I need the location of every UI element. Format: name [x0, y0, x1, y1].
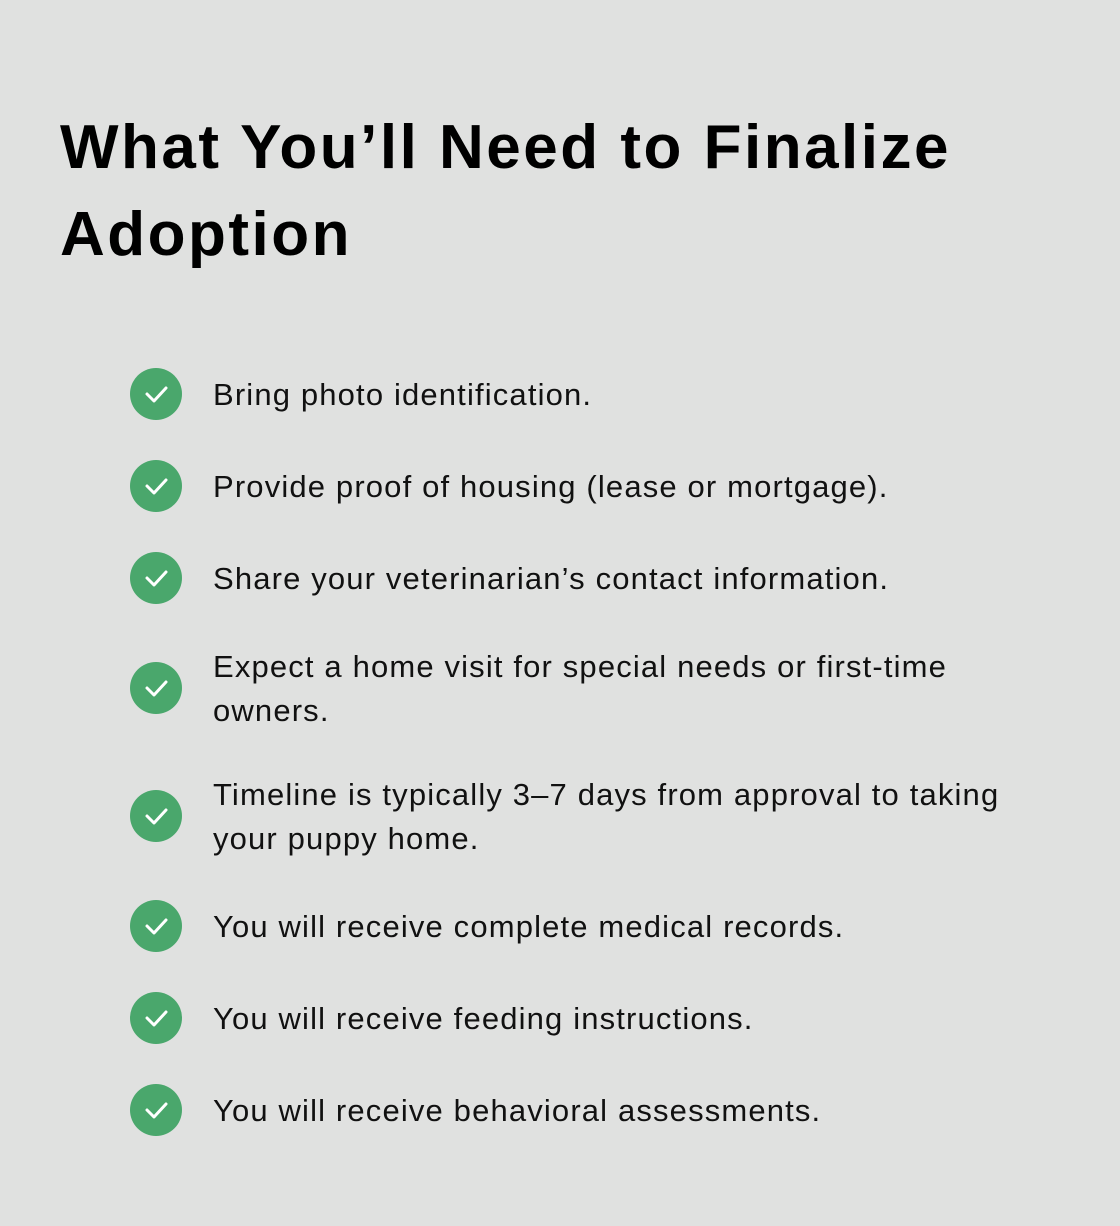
item 8: You will receive behavioral assessments.: [213, 1093, 821, 1128]
item 3: Share your veterinarian’s contact information.: [213, 561, 889, 596]
item 4: Expect a home visit for special needs or first-time: [213, 649, 947, 684]
title: What You’ll Need to Finalize: [60, 113, 951, 182]
item 2: Provide proof of housing (lease or mortgage).: [213, 469, 889, 504]
item 1: Bring photo identification.: [213, 377, 592, 412]
icon: check: [130, 460, 182, 512]
item 5: Timeline is typically 3–7 days from approval to taking: [213, 777, 999, 812]
icon: check: [130, 662, 182, 714]
icon: check: [130, 790, 182, 842]
icon: check: [130, 1084, 182, 1136]
item 6: [130, 900, 844, 952]
item 6: You will receive complete medical records.: [213, 909, 844, 944]
item 7: [130, 992, 754, 1044]
title: Adoption: [60, 200, 352, 269]
item 5: your puppy home.: [213, 821, 480, 856]
item 3: [130, 552, 889, 604]
icon: check: [130, 368, 182, 420]
item 8: [130, 1084, 821, 1136]
title: [60, 113, 951, 269]
item 1: [130, 368, 592, 420]
icon: check: [130, 992, 182, 1044]
icon: check: [130, 552, 182, 604]
item 4: owners.: [213, 693, 330, 728]
item 4: [130, 649, 947, 728]
item 7: You will receive feeding instructions.: [213, 1001, 754, 1036]
item 5: [130, 777, 999, 856]
icon: check: [130, 900, 182, 952]
item 2: [130, 460, 889, 512]
